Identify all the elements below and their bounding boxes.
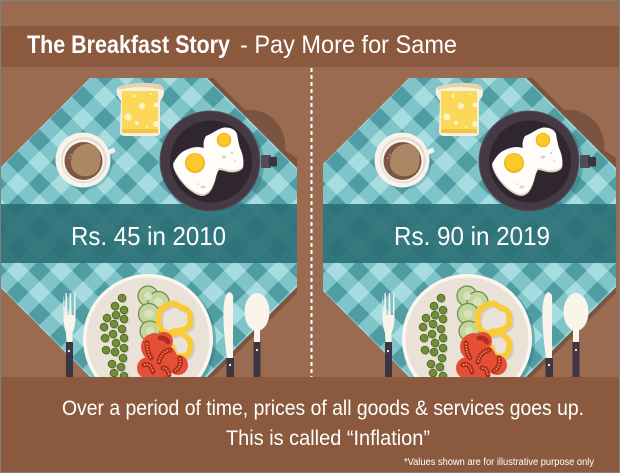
disclaimer: *Values shown are for illustrative purpose only — [404, 457, 594, 468]
icon: spoon — [564, 293, 588, 378]
icon: plate of vegetables — [83, 274, 216, 406]
icon: frying pan with eggs — [478, 110, 596, 215]
panel: left breakfast table 2010 — [0, 78, 297, 406]
price band — [0, 204, 297, 263]
footer band — [0, 377, 620, 473]
price band — [323, 204, 616, 263]
icon: spoon — [244, 293, 270, 378]
icon: toast with cheese — [436, 83, 483, 136]
tablecloth — [0, 78, 297, 377]
table shadow — [207, 78, 297, 377]
tablecloth — [323, 78, 616, 377]
divider: dashed line — [310, 68, 312, 377]
header band — [0, 26, 620, 67]
icon: plate of vegetables — [402, 274, 535, 406]
icon: coffee cup — [56, 132, 116, 190]
icon: frying pan with eggs — [160, 110, 277, 215]
explanation line 2: This is called “Inflation” — [226, 427, 430, 450]
subtitle: - Pay More for Same — [240, 31, 457, 59]
icon: knife — [223, 292, 234, 378]
icon: coffee cup — [374, 132, 434, 190]
panel: right breakfast table 2019 — [323, 78, 616, 406]
icon: toast with cheese — [117, 83, 164, 136]
price label 2019: Rs. 90 in 2019 — [394, 221, 550, 251]
explanation line 1: Over a period of time, prices of all goods & services goes up. — [62, 397, 584, 420]
icon: knife — [542, 292, 553, 378]
icon: fork — [382, 293, 394, 378]
price label 2010: Rs. 45 in 2010 — [71, 221, 226, 251]
icon: fork — [64, 293, 76, 378]
title: The Breakfast Story — [27, 31, 230, 59]
table shadow — [526, 78, 616, 377]
